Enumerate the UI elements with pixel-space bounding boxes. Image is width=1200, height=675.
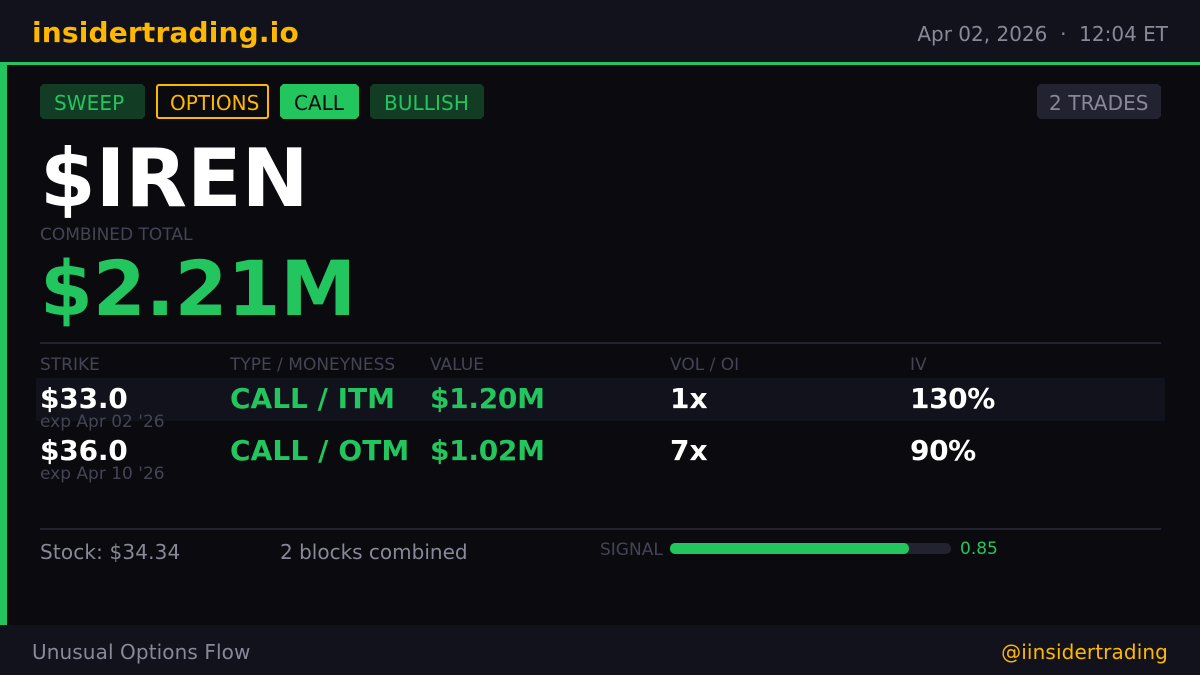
footer divider bbox=[40, 528, 1161, 530]
tag: sweep: SWEEP bbox=[54, 91, 124, 115]
stock price: Stock: $34.34 bbox=[40, 540, 180, 564]
row highlight bbox=[36, 378, 1165, 421]
table row 2: exp Apr 10 '26 bbox=[40, 464, 165, 484]
table row 2: 90% bbox=[910, 434, 976, 467]
combined total value: $2.21M bbox=[40, 244, 356, 333]
table row 2: $36.0 bbox=[40, 434, 128, 467]
tag: call bbox=[280, 84, 359, 119]
tag: options: OPTIONS bbox=[170, 91, 259, 115]
blocks combined: 2 blocks combined bbox=[280, 540, 468, 564]
table header: IV bbox=[910, 355, 927, 375]
date and time: Apr 02, 2026 · 12:04 ET bbox=[917, 22, 1168, 46]
table row 2 bbox=[40, 434, 976, 484]
signal meter bbox=[600, 539, 998, 560]
table row 1: 1x bbox=[670, 382, 708, 415]
table row 1: $33.0 bbox=[40, 382, 128, 415]
trade count badge: 2 TRADES bbox=[1049, 91, 1149, 115]
tag: bullish bbox=[370, 84, 484, 119]
signal track bbox=[670, 543, 951, 554]
table row 1: CALL / ITM bbox=[230, 382, 395, 415]
table row 1: 130% bbox=[910, 382, 995, 415]
table header: TYPE / MONEYNESS bbox=[230, 355, 395, 375]
social handle: @iinsidertrading bbox=[1001, 640, 1168, 664]
combined total label: COMBINED TOTAL bbox=[40, 225, 192, 245]
left accent bar bbox=[0, 65, 7, 625]
signal label: SIGNAL bbox=[600, 540, 663, 560]
table row 1: exp Apr 02 '26 bbox=[40, 412, 165, 432]
table header: STRIKE bbox=[40, 355, 100, 375]
table header bbox=[40, 355, 927, 375]
tag: options bbox=[156, 84, 269, 119]
bottom caption: Unusual Options Flow bbox=[32, 640, 250, 664]
table row 2: $1.02M bbox=[430, 434, 545, 467]
tag: call: CALL bbox=[294, 91, 344, 115]
bottom bar bbox=[0, 625, 1200, 675]
signal value: 0.85 bbox=[960, 539, 998, 559]
logo: insidertrading.io bbox=[32, 16, 299, 49]
table header: VALUE bbox=[430, 355, 484, 375]
tag: bullish: BULLISH bbox=[384, 91, 469, 115]
header bar bbox=[0, 0, 1200, 65]
ticker: $IREN bbox=[40, 132, 309, 225]
signal fill bbox=[670, 543, 909, 554]
table divider bbox=[40, 342, 1161, 344]
table row 1: $1.20M bbox=[430, 382, 545, 415]
tag: sweep bbox=[40, 84, 145, 119]
table header: VOL / OI bbox=[670, 355, 739, 375]
table row 2: 7x bbox=[670, 434, 708, 467]
trade count badge bbox=[1037, 84, 1161, 119]
table row 1 bbox=[40, 382, 995, 432]
table row 2: CALL / OTM bbox=[230, 434, 409, 467]
